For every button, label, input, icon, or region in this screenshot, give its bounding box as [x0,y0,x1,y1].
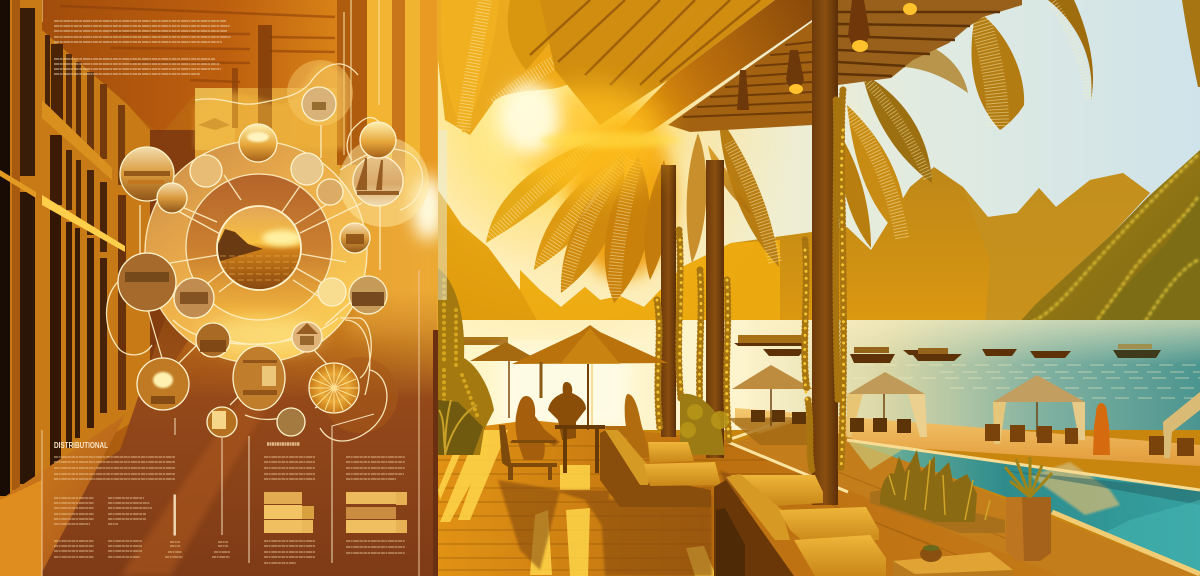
wooden dining chair [499,425,557,480]
translucent glowing network backdrop [145,60,429,433]
table [555,425,605,473]
lower brown panel and floor [0,270,438,576]
node: pavilion [349,276,387,314]
window wall [0,0,150,500]
right column: text and stacked bars [346,457,407,553]
network connector lines [106,64,422,441]
palm fronds [438,0,1200,303]
node picture details [124,102,399,429]
potted plant [1005,457,1052,561]
lower-left column: text lines (illegible) [54,457,230,557]
guest right [604,394,649,458]
ceiling [60,0,340,360]
node: trees [291,153,323,185]
node: cabin [340,223,370,253]
node: terrace [277,408,305,436]
node: boats [157,183,187,213]
cabana 2 [847,372,927,437]
lower-left column: heading: DISTRIBUTIONAL [54,441,108,450]
side table with bowl [893,545,1013,576]
lounger 2 [714,474,886,576]
sun glare [438,0,858,340]
node: dish [196,323,230,357]
guest standing [548,382,586,440]
dining umbrellas [470,325,668,430]
left foliage [438,268,494,455]
sea and boats [438,320,1200,430]
woman on beach [1093,403,1110,455]
guests at table [515,382,649,473]
node: lobby [233,346,285,410]
node: emblem [318,278,346,306]
node: village [190,155,222,187]
sun flare overlay [438,82,680,300]
network image nodes [118,87,403,437]
beach [735,408,1200,466]
frond group: top right [971,0,1200,130]
top text block (illegible lines) [54,21,231,74]
central sunset circle [217,206,302,290]
node: doorway [207,407,237,437]
small umbrella [470,342,540,418]
frond group: left palm [438,0,640,135]
middle column: text and stacked bars [264,444,315,563]
roof beams [530,0,1022,160]
panel: resort photo scene [438,0,1200,576]
node: garden [360,122,396,158]
sky [438,0,1200,340]
beach cabanas [732,365,1200,458]
boat group [462,335,1161,363]
node: dune [239,124,277,162]
yellow column bands [42,0,444,340]
panel: infographic interior [0,0,444,576]
cabana 3 [985,375,1085,444]
node: shoreline top [302,87,336,121]
node: pool scene [120,147,174,201]
cabana 4 [1149,392,1200,458]
column rules [174,414,374,563]
node: sunburst [309,363,359,413]
distant mountains [438,150,1200,338]
frond texture [463,0,1088,298]
main umbrella [512,325,668,430]
node: temple [292,322,322,352]
orange heart of the palm crown [570,122,674,278]
node: ballroom [137,358,189,410]
lounger 1 [600,430,721,507]
cabana 1 [732,365,813,426]
deck [438,420,1200,576]
frond group: centre palm [486,43,968,303]
node: market [174,278,214,318]
node: palms [353,156,403,206]
hanging lanterns [737,0,917,110]
guest left [515,396,560,460]
pool [728,415,1200,574]
planter with tropical plants [870,450,1005,533]
node: bay [317,179,343,205]
climbing vines and posts [657,0,844,505]
node: restaurant [118,253,176,311]
